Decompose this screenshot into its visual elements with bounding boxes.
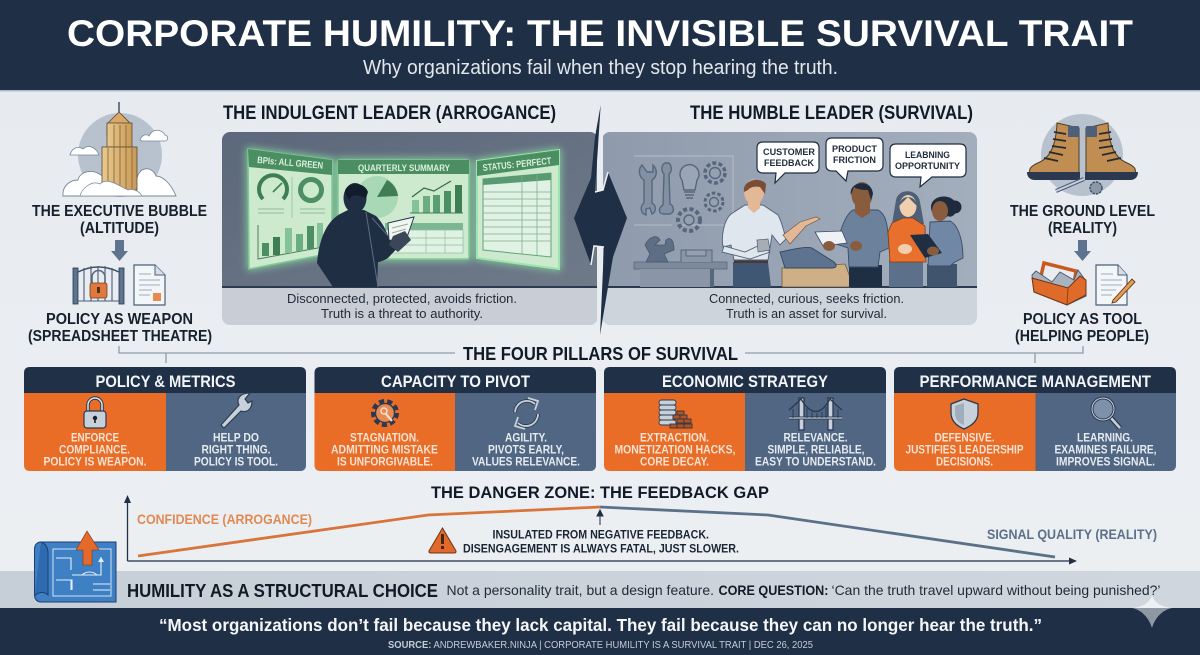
bubble: customer feedback: FEEDBACK <box>764 158 814 169</box>
text: help do right thing: RIGHT THING. <box>202 442 270 456</box>
text: extraction: MONETIZATION HACKS, <box>614 442 736 456</box>
label: confidence: CONFIDENCE (ARROGANCE) <box>137 511 312 527</box>
text: defensive <box>906 430 1024 468</box>
icon: blueprint with arrow <box>34 531 116 602</box>
chart: feedback gap <box>124 495 1157 564</box>
text: enforce compliance: ENFORCE <box>71 430 119 444</box>
caption: indulgent leader: Disconnected, protected, avoids friction. <box>287 291 517 306</box>
pillar: performance management: PERFORMANCE MANAGEMENT <box>920 372 1152 391</box>
bubble: product friction: PRODUCT <box>832 144 877 155</box>
band heading: HUMILITY AS A STRUCTURAL CHOICE <box>127 580 438 601</box>
dashboard: status perfect: STATUS: PERFECT <box>482 156 552 174</box>
text: defensive: JUSTIFIES LEADERSHIP <box>906 442 1024 456</box>
icon: work boots <box>1027 114 1138 196</box>
subtitle: Why organizations fail when they stop hearing the truth. <box>363 57 838 79</box>
lightning bolt divider <box>574 105 627 335</box>
series: signal quality <box>600 507 1055 557</box>
panel: indulgent leader <box>222 132 598 325</box>
icon: padlock <box>84 398 106 428</box>
icon: spreadsheet document <box>134 265 165 305</box>
text: defensive: DECISIONS. <box>936 454 993 468</box>
label: altitude: (ALTITUDE) <box>80 220 159 237</box>
callout: insulated from feedback: DISENGAGEMENT IS ALWAYS FATAL, JUST SLOWER. <box>463 542 739 556</box>
figure: team member in orange <box>888 191 926 287</box>
text: stagnation <box>331 430 438 468</box>
pillar: performance management <box>894 367 1176 471</box>
axes <box>124 495 1077 564</box>
callout: insulated from feedback <box>463 528 739 556</box>
label: policy as weapon: POLICY AS WEAPON <box>46 311 193 328</box>
band: structural choice <box>0 571 1200 608</box>
text: relevance: RELEVANCE. <box>784 430 848 444</box>
bubble: customer feedback <box>757 142 819 183</box>
text: agility: AGILITY. <box>505 430 547 444</box>
sparkle mark <box>1132 595 1172 628</box>
bubble: customer feedback: CUSTOMER <box>763 147 815 158</box>
text: stagnation: IS UNFORGIVABLE. <box>337 454 433 468</box>
text: extraction: CORE DECAY. <box>640 454 709 468</box>
arrow: gap <box>597 510 603 525</box>
icon: magnifying glass <box>1092 398 1120 428</box>
header banner <box>0 0 1200 92</box>
label: helping people: (HELPING PEOPLE) <box>1015 328 1149 345</box>
icon: coins and bricks <box>659 400 692 428</box>
workbench and vise <box>634 237 727 287</box>
pillar: economic strategy: ECONOMIC STRATEGY <box>662 372 829 391</box>
caption: indulgent leader <box>288 294 516 320</box>
text: stagnation: STAGNATION. <box>350 430 419 444</box>
text: stagnation: ADMITTING MISTAKE <box>331 442 438 456</box>
pegboard with tools <box>634 156 733 231</box>
dashboard: quarterly summary <box>338 160 469 259</box>
label: policy as tool: POLICY AS TOOL <box>1023 311 1142 328</box>
arrow: down to policy as weapon <box>111 240 128 261</box>
heading: indulgent leader: THE INDULGENT LEADER (ARROGANCE) <box>223 103 556 124</box>
dashboard: status perfect <box>477 150 559 269</box>
heading: danger zone: THE DANGER ZONE: THE FEEDBACK GAP <box>431 483 769 502</box>
text: enforce compliance <box>44 430 146 468</box>
callout: insulated from feedback: INSULATED FROM NEGATIVE FEEDBACK. <box>492 528 709 542</box>
title: CORPORATE HUMILITY: THE INVISIBLE SURVIVAL TRAIT <box>67 13 1133 54</box>
icon: broken gear <box>374 402 396 424</box>
text: learning: EXAMINES FAILURE, <box>1054 442 1156 456</box>
pillar: capacity to pivot <box>314 367 596 471</box>
panel: humble leader <box>602 132 977 325</box>
figure: leader in suit <box>317 183 414 287</box>
core question: ‘Can the truth travel upward without being punished?’ <box>832 582 1160 598</box>
pillar: capacity to pivot: CAPACITY TO PIVOT <box>381 372 531 391</box>
arrow: down to policy as tool <box>1074 240 1091 261</box>
column: executive bubble <box>28 102 212 345</box>
screen glow <box>246 147 561 271</box>
caption: humble leader <box>710 294 903 318</box>
text: defensive: DEFENSIVE. <box>934 430 994 444</box>
text: agility: VALUES RELEVANCE. <box>472 454 580 468</box>
bubble: product friction: FRICTION <box>833 155 876 166</box>
quote: “Most organizations don’t fail because they lack capital. They fail because they can no longer hear the truth.” <box>159 615 1042 635</box>
label: spreadsheet theatre: (SPREADSHEET THEATRE) <box>28 328 212 345</box>
connector: columns to pillars <box>119 346 1083 363</box>
text: enforce compliance: COMPLIANCE. <box>59 442 130 456</box>
pillar: policy and metrics: POLICY & METRICS <box>96 372 236 391</box>
bubble: product friction <box>826 138 883 181</box>
caption: humble leader: Truth is an asset for survival. <box>726 306 887 321</box>
heading: four pillars: THE FOUR PILLARS OF SURVIVAL <box>463 344 738 364</box>
pillar: policy and metrics <box>24 367 306 471</box>
figure: team member with notes <box>815 182 889 287</box>
icon: bridge <box>789 398 842 430</box>
column: ground level <box>1010 114 1155 345</box>
bubble: learning opportunity: LEABNING <box>905 150 950 161</box>
text: enforce compliance: POLICY IS WEAPON. <box>44 454 146 468</box>
bubble: learning opportunity <box>890 144 966 187</box>
text: help do right thing: HELP DO <box>213 430 259 444</box>
band description: Not a personality trait, but a design feature. <box>446 582 714 598</box>
core question label: CORE QUESTION: <box>718 582 828 598</box>
text: extraction: EXTRACTION. <box>640 430 709 444</box>
heading: humble leader: THE HUMBLE LEADER (SURVIVAL) <box>690 103 973 124</box>
text: agility: PIVOTS EARLY, <box>488 442 564 456</box>
text: relevance: SIMPLE, RELIABLE, <box>768 442 864 456</box>
bench with shoe <box>780 247 850 287</box>
series: confidence <box>138 507 600 556</box>
text: agility <box>472 430 580 468</box>
footer <box>0 608 1200 655</box>
dashboard: quarterly summary: QUARTERLY SUMMARY <box>358 163 451 174</box>
text: learning: IMPROVES SIGNAL. <box>1056 454 1155 468</box>
icon: wrench <box>221 393 252 428</box>
label: signal quality: SIGNAL QUALITY (REALITY) <box>987 526 1157 542</box>
label: the executive bubble: THE EXECUTIVE BUBBLE <box>32 203 207 220</box>
icon: shield <box>951 399 978 429</box>
text: learning: LEARNING. <box>1077 430 1133 444</box>
text: relevance: EASY TO UNDERSTAND. <box>755 454 876 468</box>
dashboard: kpis all green <box>248 149 332 269</box>
icon: warning triangle <box>429 528 456 553</box>
text: help do right thing <box>194 430 278 468</box>
icon: skyscraper in clouds <box>63 102 176 197</box>
caption: humble leader: Connected, curious, seeks friction. <box>709 291 904 306</box>
bubble: learning opportunity: OPPORTUNITY <box>895 161 961 172</box>
label: reality: (REALITY) <box>1048 220 1117 237</box>
source: SOURCE: ANDREWBAKER.NINJA | CORPORATE HUMILITY IS A SURVIVAL TRAIT | DEC 26, 2025 <box>388 640 813 651</box>
text: learning <box>1054 430 1156 468</box>
text: extraction <box>614 430 736 468</box>
text: help do right thing: POLICY IS TOOL. <box>194 454 278 468</box>
figure: team member with tablet <box>910 196 963 287</box>
icon: document and pencil <box>1096 265 1135 305</box>
text: relevance <box>755 430 876 468</box>
figure: humble leader <box>722 180 820 287</box>
label: the ground level: THE GROUND LEVEL <box>1010 203 1155 220</box>
pillar: economic strategy <box>604 367 886 471</box>
icon: toolbox <box>1032 263 1086 305</box>
icon: locked gate <box>73 266 124 304</box>
icon: refresh arrows <box>515 398 538 429</box>
dashboard: kpis all green: BPIs: ALL GREEN <box>257 155 324 172</box>
caption: indulgent leader: Truth is a threat to authority. <box>321 306 483 321</box>
